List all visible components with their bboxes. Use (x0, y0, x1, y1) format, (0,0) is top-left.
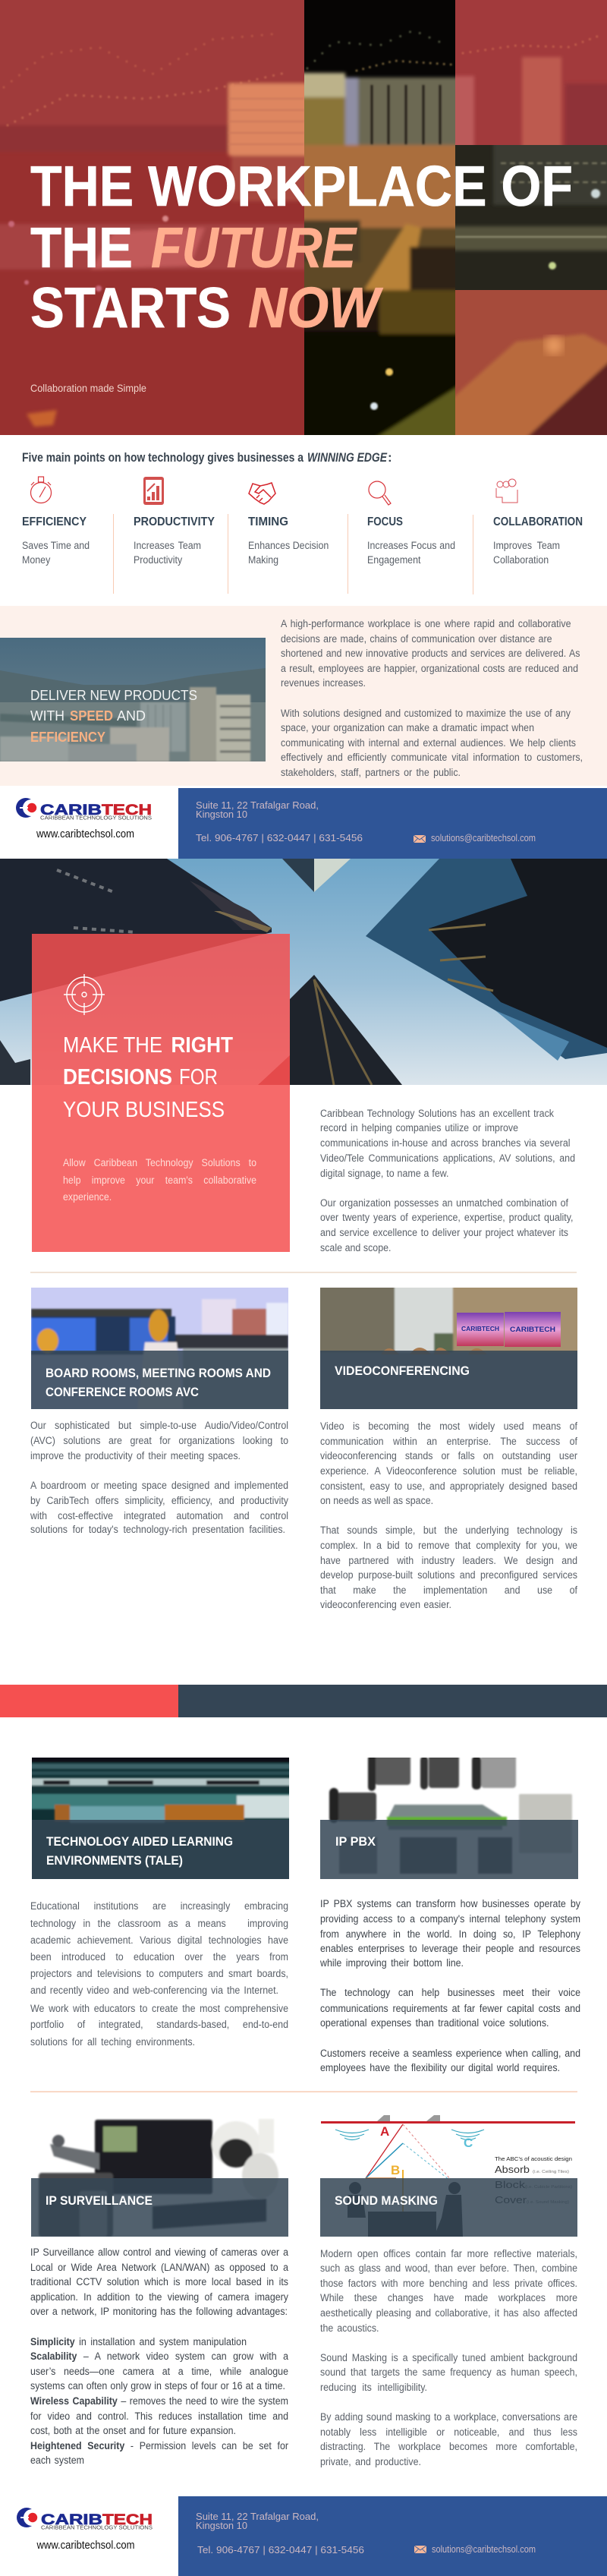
text: track record: and service excellence to deliver your project whatever its (320, 1227, 568, 1238)
headline: deliver new products: AND (117, 708, 146, 724)
heading: make the right decisions: DECISIONS (63, 1065, 172, 1089)
text: videoconferencing body: on needs as well as space. (320, 1495, 433, 1506)
heading: hero title: STARTS (30, 276, 231, 339)
panel: sound masking card: A (380, 2124, 389, 2139)
panel: videoconferencing card: CARIBTECH (461, 1326, 499, 1332)
text: videoconferencing body: videoconferencing even easier. (320, 1599, 451, 1610)
text: IP surveillance body: traditional CCTV solution which is more local based in its (30, 2276, 288, 2288)
text: IP PBX body: employees have the flexibility our digital world requires. (320, 2062, 560, 2073)
text: high-performance workplace (281, 618, 583, 778)
text: IP surveillance body: Wireless Capability – removes the need to wire the system (30, 2395, 288, 2407)
text: videoconferencing body: that make the implementation and use of (320, 1584, 577, 1596)
headline: deliver new products: EFFICIENCY (30, 729, 106, 745)
panel: sound masking card: (i.e. Cubicle Partitions) (525, 2185, 572, 2190)
heading: focus: FOCUS (367, 516, 403, 528)
text: IP surveillance body: systems can often only grow in steps of four or 16 at a time. (30, 2380, 285, 2392)
text: IP PBX body: while improving their bottom line. (320, 1957, 464, 1969)
text: IP surveillance body: over a network, IP monitoring has the following advantages: (30, 2306, 288, 2317)
heading: technology aided learning: ENVIRONMENTS (TALE) (46, 1853, 183, 1868)
text: videoconferencing body: communication within an enterprise. The success of (320, 1436, 577, 1447)
text: IP surveillance body: each system (30, 2455, 84, 2466)
text: collaboration description: Collaboration (493, 554, 549, 566)
icon: tablet chart (143, 477, 164, 505)
text: IP PBX body: operational expenses than traditional voice solutions. (320, 2017, 549, 2029)
logo: CaribTech: CARIB (40, 802, 102, 818)
text: sound masking body: aesthetically pleasing and collaborative, it has also affected (320, 2307, 577, 2319)
text: IP surveillance body: cost, both at the onset and for future expansion. (30, 2425, 236, 2436)
text: board rooms body: (AVC) solutions are great for organizations looking to (30, 1435, 288, 1446)
panel: sound masking card: The ABC's of acoustic design (495, 2155, 572, 2162)
text: technology aided learning body: and recently video and web-conferencing via the Internet. (30, 1985, 278, 1996)
heading: hero title (30, 154, 573, 339)
heading: technology aided learning (46, 1834, 233, 1868)
text: technology aided learning body (30, 1900, 288, 2048)
icon: target (64, 974, 105, 1015)
panel: technology aided learning card (28, 1754, 294, 1879)
text: focus description (367, 540, 455, 566)
text: track record: Caribbean Technology Solutions has an excellent track (320, 1108, 553, 1119)
text: productivity description (134, 540, 201, 566)
text: high-performance workplace: a result, employees are happier, organizational costs are reduced and (281, 663, 578, 674)
panel: IP PBX card (320, 1753, 578, 1879)
text: track record: record in helping companies utilize or improve (320, 1122, 517, 1134)
text: technology aided learning body: solutions for all teching environments. (30, 2036, 195, 2048)
heading: videoconferencing: VIDEOCONFERENCING (335, 1364, 470, 1378)
text: technology aided learning body: projectors and televisions to computers and smart boards, (30, 1968, 288, 1979)
text: board rooms body (30, 1420, 288, 1535)
text: track record: digital signage, to name a few. (320, 1168, 448, 1179)
text: sound masking body: distracting. The workplace becomes more comfortable, (320, 2441, 577, 2452)
text: focus description: Engagement (367, 554, 420, 566)
heading: make the right decisions: RIGHT (171, 1033, 233, 1058)
text: sound masking body: sound that targets the same frequency as human speech, (320, 2366, 577, 2378)
text: IP surveillance body: Scalability – A network video system can grow with a (30, 2351, 288, 2362)
icon: handshake (249, 483, 275, 504)
text: sound masking body: the acoustics. (320, 2322, 379, 2334)
text: technology aided learning body: technology in the classroom as a means improving (30, 1918, 288, 1929)
address and phone footer: Kingston 10 (196, 2521, 247, 2531)
text: sound masking body: Sound Masking is a specifically tuned ambient background (320, 2352, 577, 2363)
text: track record: communications in-house and across branches via several (320, 1137, 570, 1149)
panel: skyscraper photo (0, 859, 607, 1085)
text: videoconferencing body: Video is becoming the most widely used means of (320, 1420, 577, 1432)
text: technology aided learning body: academic achievement. Various digital technologies have (30, 1934, 288, 1946)
panel: contact strip top (16, 788, 607, 859)
text: sound masking body: While these changes have made workplaces more (320, 2292, 577, 2303)
heading: make the right decisions: MAKE THE (63, 1033, 162, 1058)
panel: red decision card (32, 934, 290, 1252)
heading: make the right decisions (63, 1033, 233, 1122)
logo: CaribTech footer (17, 2508, 153, 2531)
heading: make the right decisions: FOR (179, 1065, 218, 1089)
heading: efficiency: EFFICIENCY (22, 516, 86, 528)
panel: peach intro band (0, 606, 607, 786)
text: IP surveillance body (30, 2247, 288, 2466)
divider band (0, 1685, 607, 1717)
text: efficiency description (22, 540, 90, 566)
logo: CaribTech (16, 798, 152, 821)
text: videoconferencing body: develop purpose-built solutions and preconfigured services (320, 1569, 577, 1581)
icon: magnifier (369, 481, 391, 505)
address and phone: Kingston 10 (196, 809, 247, 820)
text: IP PBX body: from anywhere in the world. In doing so, IP Telephony (320, 1928, 580, 1940)
email footer: solutions@caribtechsol.com (432, 2543, 536, 2555)
panel: sound masking card: Absorb (495, 2164, 530, 2175)
headline: deliver new products: SPEED (70, 708, 113, 724)
text: red card body: experience. (63, 1191, 112, 1203)
text: technology aided learning body: Educational institutions are increasingly embracing (30, 1900, 288, 1912)
text: IP surveillance body: user’s needs—one camera at a time, while analogue (30, 2366, 288, 2377)
text: collaboration description: Improves Team (493, 540, 560, 551)
text: IP surveillance body: Local or Wide Area Network (LAN/WAN) as opposed to a (30, 2262, 288, 2273)
text: sound masking body: notably less intelligible or noticeable, and thus less (320, 2426, 577, 2438)
text: IP PBX body: Customers receive a seamless experience when calling, and (320, 2048, 580, 2059)
heading: productivity: PRODUCTIVITY (134, 516, 215, 528)
heading: five main points: Five main points on how technology gives businesses a (22, 450, 304, 465)
text: IP PBX body: providing access to a company's internal telephony system (320, 1913, 580, 1925)
text: videoconferencing body: consistent, easy to use, and appropriately designed based (320, 1480, 577, 1492)
icon: envelope (414, 835, 426, 843)
text: red card body: help improve your team's collaborative (63, 1174, 256, 1186)
text: track record (320, 1108, 575, 1253)
logo: CaribTech: TECH (102, 802, 152, 818)
heading: make the right decisions: YOUR BUSINESS (63, 1098, 225, 1122)
text: collaboration description (493, 540, 560, 566)
logo: CaribTech: CARIBBEAN TECHNOLOGY SOLUTIONS (40, 815, 152, 821)
text: efficiency description: Money (22, 554, 50, 566)
logo: CaribTech footer: TECH (102, 2512, 153, 2528)
text: productivity description: Productivity (134, 554, 182, 566)
heading: technology aided learning: TECHNOLOGY AIDED LEARNING (46, 1834, 233, 1849)
panel: videoconferencing card: CARIBTECH (510, 1326, 555, 1333)
email: solutions@caribtechsol.com (431, 832, 536, 843)
icon: envelope footer (414, 2546, 426, 2553)
text: IP surveillance body: Heightened Security - Permission levels can be set for (30, 2440, 288, 2451)
text: board rooms body: Our sophisticated but simple-to-use Audio/Video/Control (30, 1420, 288, 1431)
heading: IP surveillance: IP SURVEILLANCE (46, 2193, 153, 2208)
text: sound masking body: such as glass and wood, than ever before. Then, combine (320, 2262, 577, 2274)
text: high-performance workplace: shortened and new innovative products and services are delivered. As (281, 648, 580, 659)
panel: sound masking card: Block (495, 2179, 526, 2190)
panel: sound masking card: Cover (495, 2194, 527, 2206)
heading: IP PBX: IP PBX (335, 1834, 376, 1849)
text: IP PBX body: enables enterprises to leverage their people and resources (320, 1943, 580, 1954)
heading: hero title: THE (30, 216, 133, 279)
address and phone: Suite 11, 22 Trafalgar Road, (196, 800, 319, 811)
headline: deliver new products: WITH (30, 708, 64, 724)
icon: team (496, 479, 517, 503)
heading: board rooms: CONFERENCE ROOMS AVC (46, 1385, 199, 1399)
heading: sound masking: SOUND MASKING (335, 2193, 438, 2208)
text: videoconferencing body: have partnered with industry leaders. We design and (320, 1555, 577, 1566)
panel: IP surveillance card (31, 2115, 288, 2237)
text: board rooms body: A boardroom or meeting space designed and implemented (30, 1480, 288, 1491)
text: videoconferencing body: videoconferencing stands or falls on outstanding user (320, 1450, 577, 1461)
text: track record: Video/Tele Communications applications, AV solutions, and (320, 1152, 574, 1164)
text: sound masking body: Modern open offices contain far more reflective materials, (320, 2248, 577, 2259)
icon: stopwatch (30, 477, 52, 503)
heading: collaboration: COLLABORATION (493, 516, 583, 528)
panel: hero night city photo with title (0, 0, 607, 440)
text: IP surveillance body: IP Surveillance allow control and viewing of cameras over a (30, 2247, 288, 2258)
text: IP PBX body: IP PBX systems can transform how businesses operate by (320, 1898, 580, 1909)
address and phone footer (196, 2511, 364, 2556)
panel: five points (22, 477, 583, 594)
logo: CaribTech footer: CARIB (41, 2512, 102, 2528)
text: timing description: Enhances Decision (248, 540, 329, 551)
text: high-performance workplace: A high-performance workplace is one where rapid and collaborative (281, 618, 571, 629)
heading: board rooms (46, 1366, 271, 1399)
text: sound masking body: private, and productive. (320, 2456, 421, 2467)
text: high-performance workplace: communicating with internal and external audiences. We help clients (281, 737, 576, 749)
text: board rooms body: solutions for today's technology-rich presentation facilities. (30, 1524, 285, 1535)
text: videoconferencing body: experience. A Videoconference solution must be reliable, (320, 1465, 577, 1477)
panel: board rooms card (31, 1288, 288, 1409)
text: timing description: Making (248, 554, 278, 566)
text: high-performance workplace: decisions are made, chains of communication over distance are (281, 633, 552, 645)
text: IP surveillance body: for video and control. This reduces installation time and (30, 2410, 288, 2422)
headline: deliver new products (30, 687, 197, 745)
panel: sound masking card: C (464, 2136, 473, 2150)
text: efficiency description: Saves Time and (22, 540, 90, 551)
text: track record: over twenty years of experience, expertise, product quality, (320, 1212, 573, 1223)
text: videoconferencing body (320, 1420, 577, 1610)
text: videoconferencing body: That sounds simple, but the underlying technology is (320, 1524, 577, 1536)
logo: CaribTech footer: CARIBBEAN TECHNOLOGY SOLUTIONS (41, 2525, 153, 2531)
panel: sound masking card: B (391, 2163, 400, 2177)
text: technology aided learning body: We work with educators to create the most comprehensive (30, 2003, 288, 2014)
panel: contact strip bottom (17, 2496, 607, 2576)
website: www.caribtechsol.com (36, 828, 134, 840)
text: high-performance workplace: revenues increases. (281, 677, 366, 689)
heading: five main points: : (388, 450, 392, 465)
text: high-performance workplace: With solutions designed and customized to maximize the use of any (281, 708, 571, 719)
text: IP surveillance body: application. In addition to the viewing of camera imagery (30, 2291, 288, 2303)
text: timing description (248, 540, 329, 566)
panel: sound masking card: (i.e. Ceiling Tiles) (533, 2170, 569, 2174)
text: focus description: Increases Focus and (367, 540, 455, 551)
text: track record: scale and scope. (320, 1242, 391, 1253)
text: IP surveillance body: Simplicity in installation and system manipulation (30, 2336, 247, 2347)
address and phone footer: Tel. 906-4767 | 632-0447 | 631-5456 (197, 2545, 364, 2556)
text: sound masking body: those factors with more benching and less private offices. (320, 2278, 577, 2289)
text: high-performance workplace: space, your organization can make a dramatic impact when (281, 722, 534, 733)
text: technology aided learning body: been introduced to education over the years from (30, 1951, 288, 1963)
text: IP PBX body (320, 1898, 580, 2073)
heading: board rooms: BOARD ROOMS, MEETING ROOMS AND (46, 1366, 271, 1380)
address and phone (196, 800, 363, 843)
text: board rooms body: by CaribTech offers simplicity, efficiency, and productivity (30, 1495, 288, 1506)
panel: sound masking card: (i.e. Sound Masking) (527, 2200, 569, 2205)
address and phone: Tel. 906-4767 | 632-0447 | 631-5456 (196, 833, 363, 843)
text: high-performance workplace: effectively and efficiently communicate vital information to customers, (281, 752, 583, 763)
heading: hero title: NOW (248, 276, 384, 339)
text: sound masking body: By adding sound masking to a workplace, conversations are (320, 2411, 577, 2423)
panel: city photo with headline (0, 638, 266, 761)
text: sound masking body (320, 2248, 577, 2467)
text: productivity description: Increases Team (134, 540, 201, 551)
text: IP PBX body: communications requirements at far fewer capital costs and (320, 2003, 580, 2014)
headline: deliver new products: DELIVER NEW PRODUCTS (30, 687, 197, 703)
heading: five main points: WINNING EDGE (307, 450, 388, 465)
panel: videoconferencing card (316, 1284, 581, 1413)
text: red card body: Allow Caribbean Technology Solutions to (63, 1157, 256, 1168)
website footer: www.caribtechsol.com (36, 2540, 135, 2552)
text: board rooms body: with cost-effective integrated automation and control (30, 1510, 288, 1521)
address and phone footer: Suite 11, 22 Trafalgar Road, (196, 2511, 319, 2522)
heading: timing: TIMING (248, 516, 288, 528)
text: board rooms body: improve the productivity of their meeting spaces. (30, 1450, 241, 1461)
heading: hero title: FUTURE (151, 216, 357, 279)
text: high-performance workplace: stakeholders, staff, partners or the public. (281, 767, 461, 778)
tagline: Collaboration made Simple (30, 382, 146, 394)
text: videoconferencing body: complex. In a bid to remove that complexity for you, we (320, 1540, 577, 1551)
text: red card body (63, 1157, 256, 1203)
text: technology aided learning body: portfolio of integrated, standards-based, end-to-end (30, 2019, 288, 2030)
text: IP PBX body: The technology can help businesses meet their voice (320, 1987, 580, 1998)
text: track record: Our organization possesses an unmatched combination of (320, 1197, 568, 1209)
text: sound masking body: reducing its intelligibility. (320, 2382, 427, 2393)
panel: sound masking card (320, 2115, 577, 2237)
